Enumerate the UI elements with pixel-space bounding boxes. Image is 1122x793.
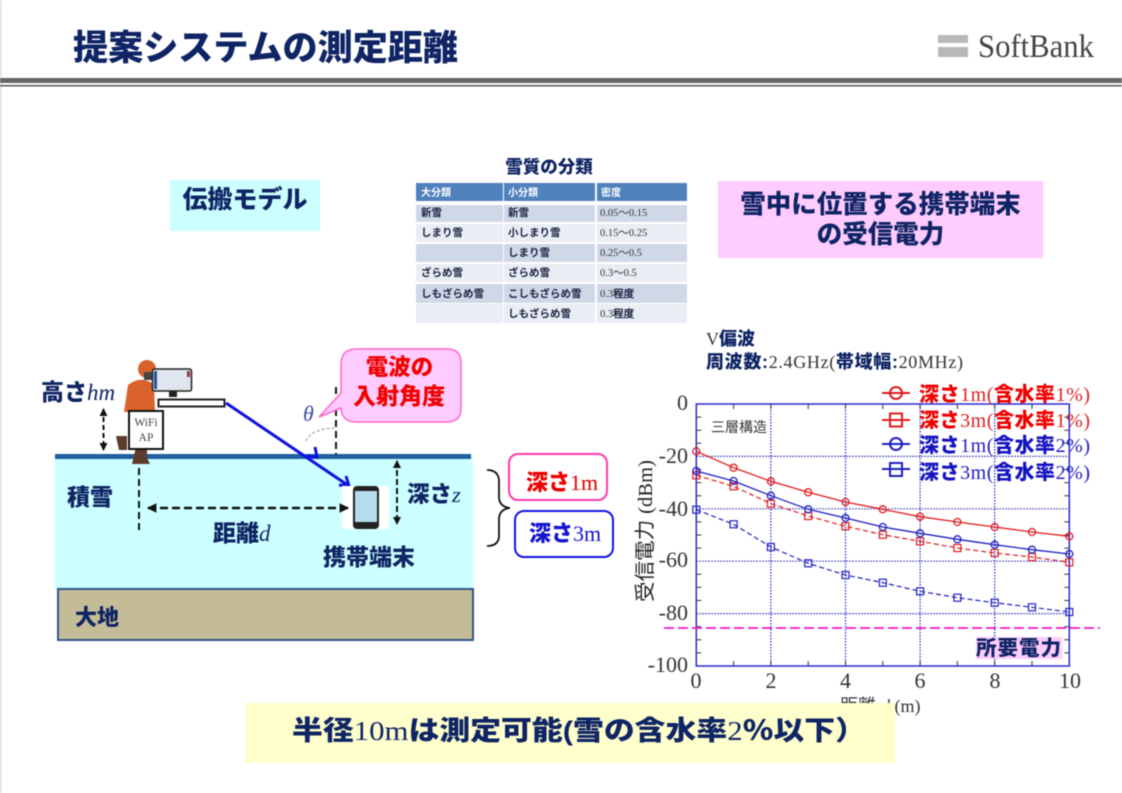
required power line (664, 627, 1100, 629)
legend: 深さ1m(含水率1%) (919, 382, 1090, 406)
label: distance: 距離d (213, 520, 271, 546)
x axis labels (690, 668, 1081, 693)
conclusion banner (245, 703, 895, 763)
label box: depth 1m (509, 454, 607, 500)
ticks (696, 404, 1069, 666)
arrow: distance (148, 507, 348, 509)
table: snow classification: しもざらめ雪 (421, 287, 484, 300)
table: snow classification: ざらめ雪 (508, 266, 550, 279)
ground (58, 589, 473, 640)
vertical normal line (335, 387, 337, 455)
ground: 大地 (75, 605, 119, 630)
table: snow classification: 0.25〜0.5 (600, 248, 642, 259)
callout: incident angle: 入射角度 (353, 383, 445, 409)
table: snow classification: 新雪 (508, 206, 529, 219)
table: snow classification: 大分類 (421, 186, 451, 199)
y axis title: 受信電力 (dBm) (634, 460, 657, 602)
table: snow classification: しまり雪 (508, 247, 550, 259)
vertical reference line at AP (138, 468, 140, 533)
table: snow classification: こしもざらめ雪 (508, 287, 582, 300)
label: required power: 所要電力 (976, 637, 1061, 660)
snow layer (55, 457, 473, 589)
table: snow classification: しもざらめ雪 (508, 307, 571, 320)
series: depth 3m, water 1% (693, 472, 1073, 566)
series: depth 3m, water 2% (693, 506, 1073, 616)
label: height: 高さhm (41, 379, 115, 405)
brace (487, 470, 510, 546)
x axis labels: 6 (914, 668, 926, 693)
y axis labels: -60 (659, 547, 688, 572)
label box: depth 3m: 深さ3m (529, 521, 601, 546)
table: snow classification: 0.05〜0.15 (600, 208, 647, 219)
heading: propagation model: 伝搬モデル (182, 185, 308, 214)
snow surface (55, 454, 471, 459)
heading: received power: 雪中に位置する携帯端末 (740, 191, 1021, 219)
table: snow classification: 0.3〜0.5 (600, 268, 637, 279)
x axis labels: 10 (1059, 668, 1081, 693)
series: depth 1m, water 2% (693, 468, 1073, 558)
grid (696, 404, 1069, 666)
person (116, 360, 156, 464)
chart conditions: 周波数:2.4GHz(帯域幅:20MHz) (706, 351, 963, 373)
title: 提案システムの測定距離 (73, 29, 458, 68)
y axis labels: -20 (659, 443, 688, 468)
table: snow classification (416, 157, 687, 323)
heading: received power (718, 181, 1043, 258)
arrow: radio wave (226, 403, 349, 486)
heading: received power: の受信電力 (817, 221, 944, 249)
annotation: three layer: 三層構造 (711, 419, 767, 435)
conclusion banner: 半径 10m は測定可能(雪の含水率 2％以下） (292, 716, 866, 746)
x axis labels: 2 (766, 668, 776, 693)
box: WiFi AP (129, 411, 163, 449)
label: snow: 積雪 (67, 484, 113, 510)
plot frame (696, 404, 1069, 666)
table: snow classification: 0.3程度 (600, 307, 635, 320)
box: WiFi AP: WiFi (134, 417, 158, 429)
box: WiFi AP: AP (139, 432, 153, 444)
icon: phone (342, 486, 389, 529)
callout: incident angle: 電波の (366, 355, 433, 380)
legend: 深さ3m(含水率1%) (919, 408, 1090, 432)
x axis labels: 4 (840, 668, 851, 693)
x axis title: 距離 d (m) (840, 696, 921, 717)
diagram: propagation model (41, 349, 613, 640)
chart conditions: V偏波 (706, 329, 755, 349)
table: snow classification: 小分類 (508, 186, 538, 199)
x axis labels: 0 (690, 668, 702, 693)
table: snow classification: 小しまり雪 (508, 226, 560, 239)
legend: 深さ1m(含水率2%) (919, 433, 1090, 457)
chart: received power vs distance (634, 382, 1100, 717)
table title: 雪質の分類 (505, 157, 593, 177)
heading: propagation model (170, 180, 320, 231)
header rule (0, 78, 1122, 86)
label: theta: θ (303, 401, 314, 426)
label: mobile terminal: 携帯端末 (323, 544, 415, 570)
logo: SoftBank: SoftBank (978, 29, 1094, 65)
y axis labels (648, 390, 688, 677)
y axis labels: -40 (659, 496, 688, 521)
angle arc (306, 428, 335, 441)
table: snow classification: 新雪 (421, 206, 442, 219)
table: snow classification: ざらめ雪 (421, 266, 463, 279)
y axis labels: -100 (648, 652, 688, 677)
series: depth 1m, water 1% (693, 448, 1073, 540)
label: depth: 深さz (407, 482, 461, 507)
table: snow classification: 0.15〜0.25 (600, 228, 647, 239)
label box: depth 3m (515, 511, 613, 557)
x axis labels: 8 (990, 668, 1000, 693)
table: snow classification: しまり雪 (421, 227, 463, 239)
legend (882, 382, 1090, 484)
tablet on antenna (152, 369, 224, 406)
arrow: height (102, 409, 104, 450)
y axis labels: 0 (677, 390, 688, 415)
table: snow classification: 密度 (601, 186, 621, 199)
label box: depth 1m: 深さ1m (526, 470, 598, 495)
table: snow classification: 0.3程度 (600, 287, 635, 300)
y axis labels: -80 (659, 600, 688, 625)
chart conditions (706, 329, 963, 373)
callout: incident angle (319, 349, 461, 422)
arrow: depth (396, 461, 398, 524)
legend: 深さ3m(含水率2%) (919, 460, 1090, 484)
